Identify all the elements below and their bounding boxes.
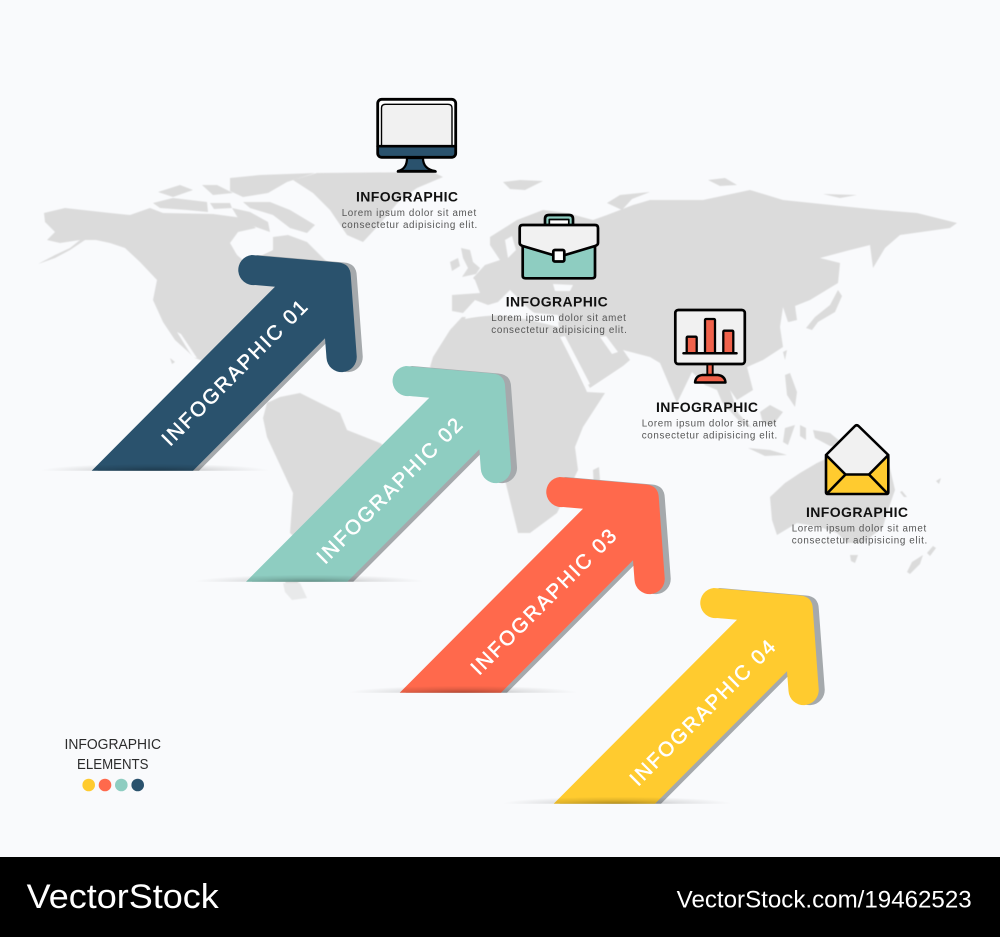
arrow body 3 — [400, 477, 665, 693]
heading 3: INFOGRAPHIC — [656, 399, 758, 415]
body 4: consectetur adipisicing elit. — [792, 536, 927, 546]
arrow 4 — [502, 588, 825, 804]
world map — [38, 172, 957, 600]
arrow 3 — [348, 477, 671, 693]
arrow label 1: INFOGRAPHIC 01 — [158, 296, 312, 451]
map water details — [177, 233, 632, 392]
body 1: consectetur adipisicing elit. — [342, 220, 477, 231]
arrow label 2: INFOGRAPHIC 02 — [313, 414, 467, 569]
legend — [64, 736, 161, 791]
arrow body 4 — [554, 588, 819, 804]
body 2: consectetur adipisicing elit. — [491, 325, 627, 336]
heading 1: INFOGRAPHIC — [356, 189, 458, 205]
arrow 1 — [40, 255, 363, 471]
body 2: Lorem ipsum dolor sit amet — [491, 313, 626, 324]
base fold shadow 4 — [502, 797, 732, 804]
arrow shadow 3 — [406, 477, 671, 693]
text block 2 — [491, 294, 627, 336]
text block 4 — [792, 504, 927, 546]
arrow label 4: INFOGRAPHIC 04 — [626, 636, 780, 791]
body 1: Lorem ipsum dolor sit amet — [342, 208, 476, 219]
icon: presentation board — [675, 310, 745, 382]
footer bar — [0, 857, 1000, 937]
body 4 — [792, 524, 927, 546]
arrow shadow 4 — [560, 588, 825, 804]
body 2 — [491, 313, 627, 336]
icon: briefcase — [520, 215, 598, 278]
body 3: consectetur adipisicing elit. — [642, 430, 777, 442]
footer url: VectorStock.com/19462523 — [677, 886, 972, 914]
body 4: Lorem ipsum dolor sit amet — [792, 524, 926, 534]
arrow label 3: INFOGRAPHIC 03 — [467, 525, 621, 680]
text block 1 — [342, 189, 477, 231]
base fold shadow 3 — [348, 686, 578, 693]
arrow 2 — [194, 366, 517, 582]
body 1 — [342, 208, 477, 231]
arrow body 1 — [92, 255, 357, 471]
arrow body 2 — [246, 366, 511, 582]
text block 3 — [642, 399, 777, 442]
legend title — [64, 736, 161, 773]
icon: monitor — [378, 99, 456, 172]
arrow shadow 2 — [252, 366, 517, 582]
legend colour dots — [82, 779, 144, 791]
base fold shadow 2 — [194, 575, 424, 582]
legend title: ELEMENTS — [77, 756, 148, 773]
footer brand: VectorStock — [27, 878, 219, 916]
base fold shadow 1 — [40, 464, 270, 471]
icon: open envelope — [826, 425, 888, 494]
heading 4: INFOGRAPHIC — [806, 504, 908, 520]
body 3: Lorem ipsum dolor sit amet — [642, 418, 776, 430]
body 3 — [642, 418, 777, 442]
arrow shadow 1 — [98, 255, 363, 471]
legend title: INFOGRAPHIC — [64, 736, 161, 753]
heading 2: INFOGRAPHIC — [506, 294, 608, 310]
